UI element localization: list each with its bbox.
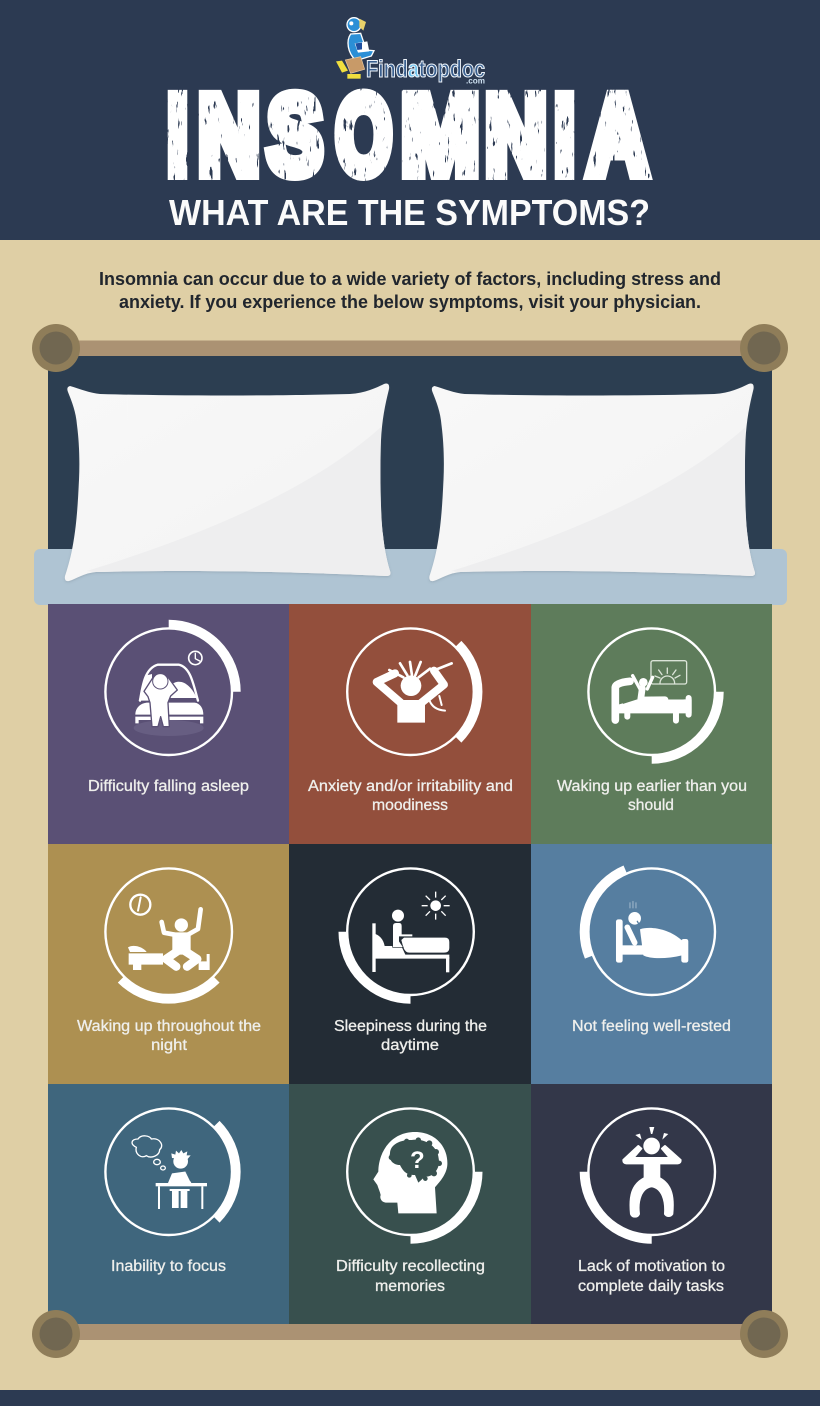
title: I — [168, 74, 188, 197]
panel: waking up throughout the night — [48, 844, 289, 1084]
logo — [336, 18, 485, 85]
intro text: Insomnia can occur due to a wide variety of factors, including stress and — [99, 269, 721, 289]
label: Difficulty recollecting — [336, 1258, 485, 1275]
progress ring — [584, 868, 715, 995]
label: Lack of motivation to — [578, 1258, 725, 1275]
intro text — [99, 269, 721, 312]
label — [77, 1018, 261, 1054]
label: Difficulty falling asleep — [88, 778, 249, 795]
bed post top right — [740, 324, 788, 372]
label — [334, 1018, 487, 1054]
icon: head with brain and question mark — [373, 1132, 447, 1213]
panel: inability to focus — [48, 1084, 289, 1324]
headboard panel — [48, 356, 772, 604]
icon: person waking in bed by sunrise window — [615, 661, 692, 721]
label: memories — [375, 1278, 445, 1295]
icon: person jumping off bed with clock — [128, 895, 210, 970]
icon: tired person in bed — [616, 901, 688, 963]
icon: person pulling hair — [377, 662, 452, 723]
panel: sleepiness during the daytime — [289, 844, 531, 1084]
progress ring — [347, 1108, 478, 1239]
icon: person sitting on bed with clock — [134, 651, 204, 736]
logo domain: .com — [466, 76, 485, 86]
bottom bed rail — [60, 1324, 760, 1340]
bed post bottom left — [32, 1310, 80, 1358]
logo mascot — [336, 18, 374, 79]
label: moodiness — [372, 797, 448, 814]
footer band — [0, 1390, 820, 1406]
icon: head with brain and question mark: ? — [410, 1147, 425, 1174]
title: N — [198, 74, 260, 197]
title: I — [554, 74, 574, 197]
label: Anxiety and/or irritability and — [308, 778, 513, 795]
label: daytime — [381, 1037, 439, 1054]
label: should — [628, 797, 674, 814]
progress ring — [105, 868, 232, 999]
title: O — [336, 74, 392, 197]
pillow right — [429, 384, 755, 581]
label: Waking up earlier than you — [557, 778, 747, 795]
intro text: anxiety. If you experience the below symptoms, visit your physician. — [119, 292, 701, 312]
progress ring — [584, 1108, 715, 1239]
label: Inability to focus — [111, 1258, 226, 1275]
panel: lack of motivation — [531, 1084, 772, 1324]
title: N — [486, 74, 546, 197]
panel: difficulty recollecting memories — [289, 1084, 531, 1324]
bed post bottom right — [740, 1310, 788, 1358]
label: Not feeling well-rested — [572, 1018, 731, 1035]
panel: difficulty falling asleep — [48, 604, 289, 844]
label: complete daily tasks — [578, 1278, 724, 1295]
pillow left — [65, 384, 390, 581]
icon: distracted person at desk — [132, 1136, 207, 1209]
mattress — [34, 549, 787, 605]
progress ring — [343, 868, 474, 999]
label: night — [151, 1037, 188, 1054]
panel: anxiety and irritability — [289, 604, 531, 844]
title: A — [588, 74, 648, 197]
progress ring — [105, 624, 236, 755]
label — [557, 778, 747, 814]
label — [308, 778, 513, 814]
label: Sleepiness during the — [334, 1018, 487, 1035]
icon: stressed figure holding head — [623, 1127, 681, 1217]
panel: not feeling well-rested — [531, 844, 772, 1084]
label — [336, 1258, 485, 1295]
title: M — [402, 74, 479, 197]
title: S — [268, 74, 322, 197]
progress ring — [105, 1108, 236, 1235]
panel: waking up earlier — [531, 604, 772, 844]
label — [578, 1258, 725, 1295]
subtitle: WHAT ARE THE SYMPTOMS? — [169, 192, 650, 233]
icon: person sitting up in bed with sun — [372, 892, 450, 972]
progress ring — [588, 628, 719, 759]
header band — [0, 0, 820, 240]
progress ring — [347, 628, 478, 755]
label: Waking up throughout the — [77, 1018, 261, 1035]
title — [168, 74, 648, 197]
logo wordmark: Findatopdoc — [366, 56, 485, 83]
bed post top left — [32, 324, 80, 372]
top bed rail — [60, 340, 760, 356]
